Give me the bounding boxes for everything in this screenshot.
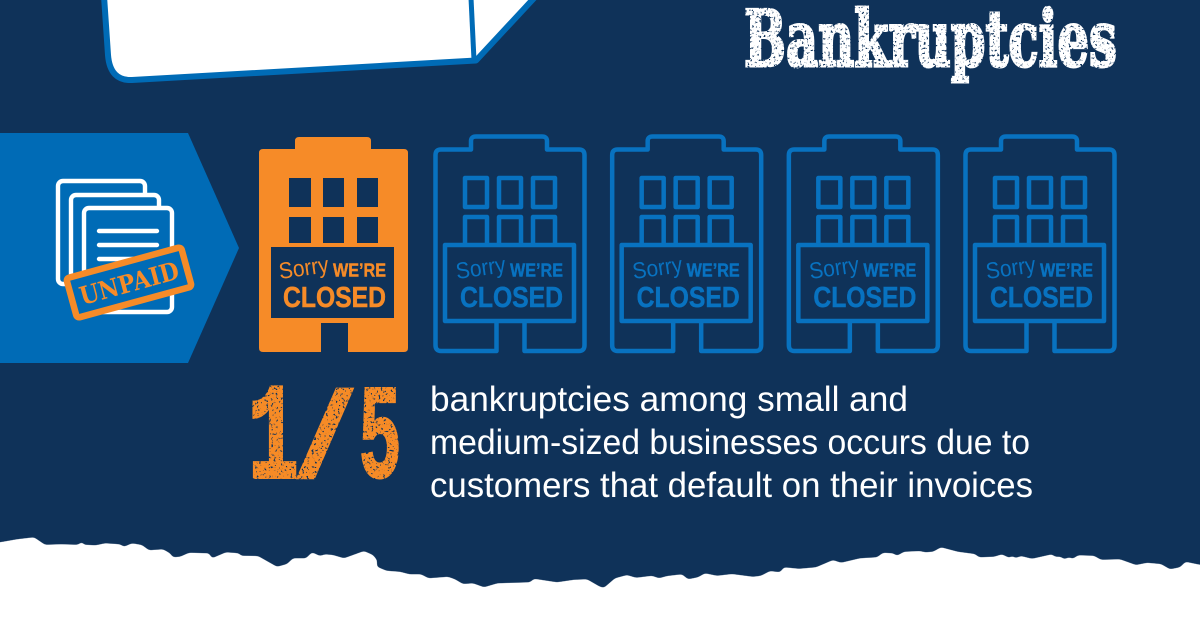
icon: closed building (highlighted orange): Sorry	[277, 251, 331, 284]
document sheet with folded corner	[104, 0, 536, 80]
icon: open building outline 4: Sorry	[984, 251, 1038, 284]
icon: open building outline 3: Sorry	[807, 251, 861, 284]
icon: closed building (highlighted orange): WE’RE	[333, 260, 386, 280]
stamp: UNPAID: UNPAID	[76, 256, 182, 311]
text block: statistic description	[430, 380, 1033, 505]
statistic: 1/5: /	[298, 368, 353, 503]
icon: open building outline 2	[612, 136, 761, 351]
icon: open building outline 3	[789, 136, 938, 351]
statistic: 1/5	[248, 361, 400, 518]
statistic: 1/5: 1	[248, 364, 299, 518]
icon: closed building (highlighted orange)	[259, 137, 408, 352]
icon: open building outline 2: WE’RE	[687, 260, 740, 280]
text block: statistic description: medium-sized businesses occurs due to	[430, 423, 1030, 462]
icon: open building outline 4: CLOSED	[990, 282, 1093, 314]
icon: closed building (highlighted orange): CLOSED	[283, 282, 386, 314]
icon: open building outline 4	[966, 136, 1114, 351]
icon: open building outline 4: WE’RE	[1040, 260, 1093, 280]
panel: blue arrow banner	[0, 133, 239, 363]
text block: statistic description: bankruptcies among small and	[430, 380, 908, 419]
torn paper edge	[0, 537, 1200, 628]
text block: statistic description: customers that default on their invoices	[430, 466, 1033, 505]
icon: open building outline 1	[436, 136, 584, 351]
icon: open building outline 1: Sorry	[454, 251, 508, 284]
icon: unpaid invoices	[58, 181, 192, 318]
icon: open building outline 2: CLOSED	[637, 282, 740, 314]
icon: open building outline 2: Sorry	[631, 251, 684, 284]
icon: open building outline 1: CLOSED	[460, 282, 563, 314]
icon: open building outline 3: WE’RE	[863, 260, 916, 280]
icon: open building outline 1: WE’RE	[510, 260, 563, 280]
icon: open building outline 3: CLOSED	[813, 282, 916, 314]
statistic: 1/5: 5	[360, 361, 400, 504]
